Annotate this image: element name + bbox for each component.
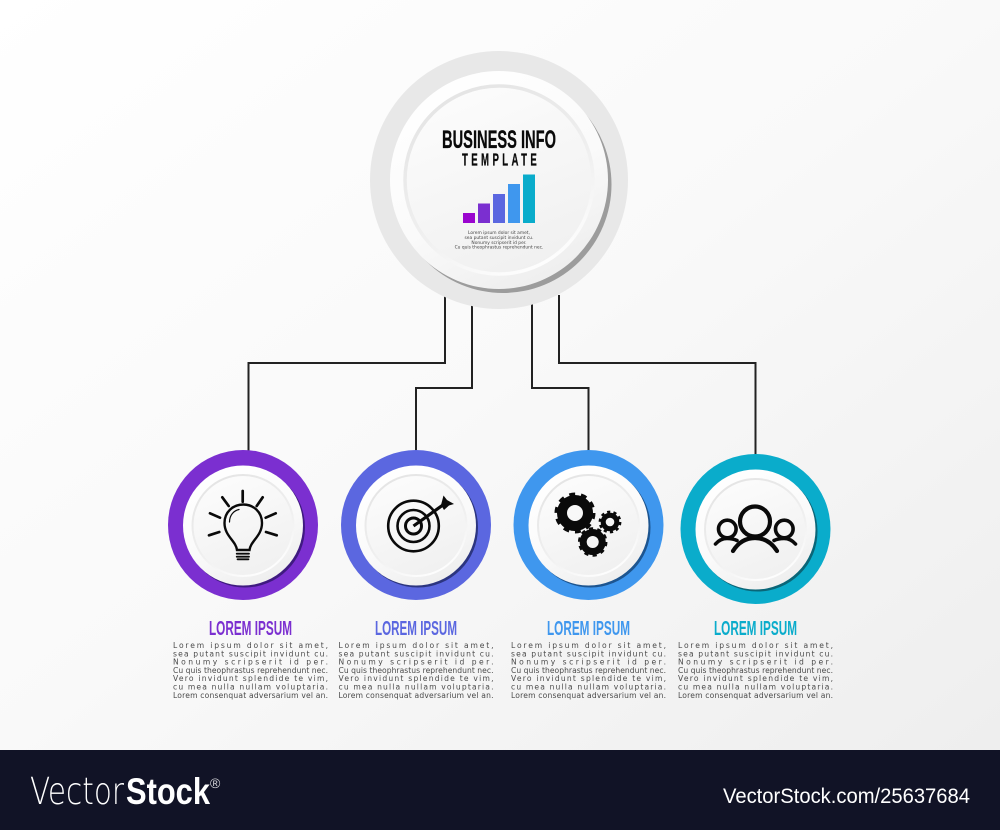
text 2: cu mea nulla nullam voluptaria.: [338, 682, 494, 692]
text 4: cu mea nulla nullam voluptaria.: [678, 682, 833, 692]
footer bar: [0, 750, 1000, 830]
text 4: Lorem consenquat adversarium vel an.: [678, 691, 833, 700]
heading 3: LOREM IPSUM: [547, 618, 630, 640]
text 3: cu mea nulla nullam voluptaria.: [511, 682, 666, 692]
footer logo: [30, 770, 221, 813]
heading 4: LOREM IPSUM: [714, 618, 797, 640]
node 3: blue: [511, 450, 666, 700]
text 3: Cu quis theophrastus reprehendunt nec.: [511, 666, 666, 675]
text 4: Vero invidunt splendide te vim,: [678, 674, 833, 683]
text 4: [678, 641, 833, 700]
text 3: sea putant suscipit invidunt cu.: [511, 649, 666, 658]
text 1: Cu quis theophrastus reprehendunt nec.: [173, 666, 328, 675]
node 4: teal: [678, 454, 833, 700]
text 4: Lorem ipsum dolor sit amet,: [678, 641, 833, 650]
text 1: [173, 641, 328, 700]
main circle: [370, 51, 628, 309]
text 2: Cu quis theophrastus reprehendunt nec.: [338, 666, 494, 675]
text 1: Lorem consenquat adversarium vel an.: [173, 691, 328, 700]
main description: [455, 230, 543, 250]
main description: Lorem ipsum dolor sit amet,: [468, 230, 530, 236]
text 3: Nonumy scripserit id per.: [511, 658, 666, 667]
node 1: purple: [168, 450, 328, 700]
text 1: sea putant suscipit invidunt cu.: [173, 649, 328, 658]
text 4: sea putant suscipit invidunt cu.: [678, 649, 833, 658]
connector lines: [248, 295, 756, 455]
text 2: Lorem consenquat adversarium vel an.: [338, 691, 494, 700]
text 4: Nonumy scripserit id per.: [678, 658, 833, 667]
icon: light bulb: [209, 491, 277, 559]
footer logo: ®: [210, 775, 221, 791]
heading 1: LOREM IPSUM: [209, 618, 292, 640]
text 3: Vero invidunt splendide te vim,: [511, 674, 666, 683]
node 2: indigo: [338, 450, 494, 700]
main description: Cu quis theophrastus reprehendunt nec.: [455, 244, 543, 250]
text 2: Lorem ipsum dolor sit amet,: [338, 641, 494, 650]
text 1: Lorem ipsum dolor sit amet,: [173, 641, 328, 650]
text 2: Nonumy scripserit id per.: [338, 658, 494, 667]
footer logo: Vector: [30, 770, 125, 813]
text 1: cu mea nulla nullam voluptaria.: [173, 682, 328, 692]
subtitle: TEMPLATE: [462, 149, 537, 169]
heading 2: LOREM IPSUM: [375, 618, 457, 640]
text 1: Vero invidunt splendide te vim,: [173, 674, 328, 683]
icon: people: [716, 506, 796, 551]
main description: Nonumy scripserit id per.: [471, 240, 527, 246]
text 2: sea putant suscipit invidunt cu.: [338, 649, 494, 658]
bar chart: [463, 174, 535, 223]
text 1: Nonumy scripserit id per.: [173, 658, 328, 667]
text 4: Cu quis theophrastus reprehendunt nec.: [678, 666, 833, 675]
icon: gears: [557, 495, 620, 555]
icon: target: [388, 496, 454, 551]
text 2: [338, 641, 494, 700]
footer url: VectorStock.com/25637684: [723, 785, 970, 808]
text 3: Lorem ipsum dolor sit amet,: [511, 641, 666, 650]
main description: sea putant suscipit invidunt cu.: [465, 235, 533, 241]
text 2: Vero invidunt splendide te vim,: [338, 674, 494, 683]
text 3: Lorem consenquat adversarium vel an.: [511, 691, 666, 700]
title: BUSINESS INFO: [442, 126, 556, 154]
text 3: [511, 641, 666, 700]
footer logo: Stock: [126, 771, 210, 812]
